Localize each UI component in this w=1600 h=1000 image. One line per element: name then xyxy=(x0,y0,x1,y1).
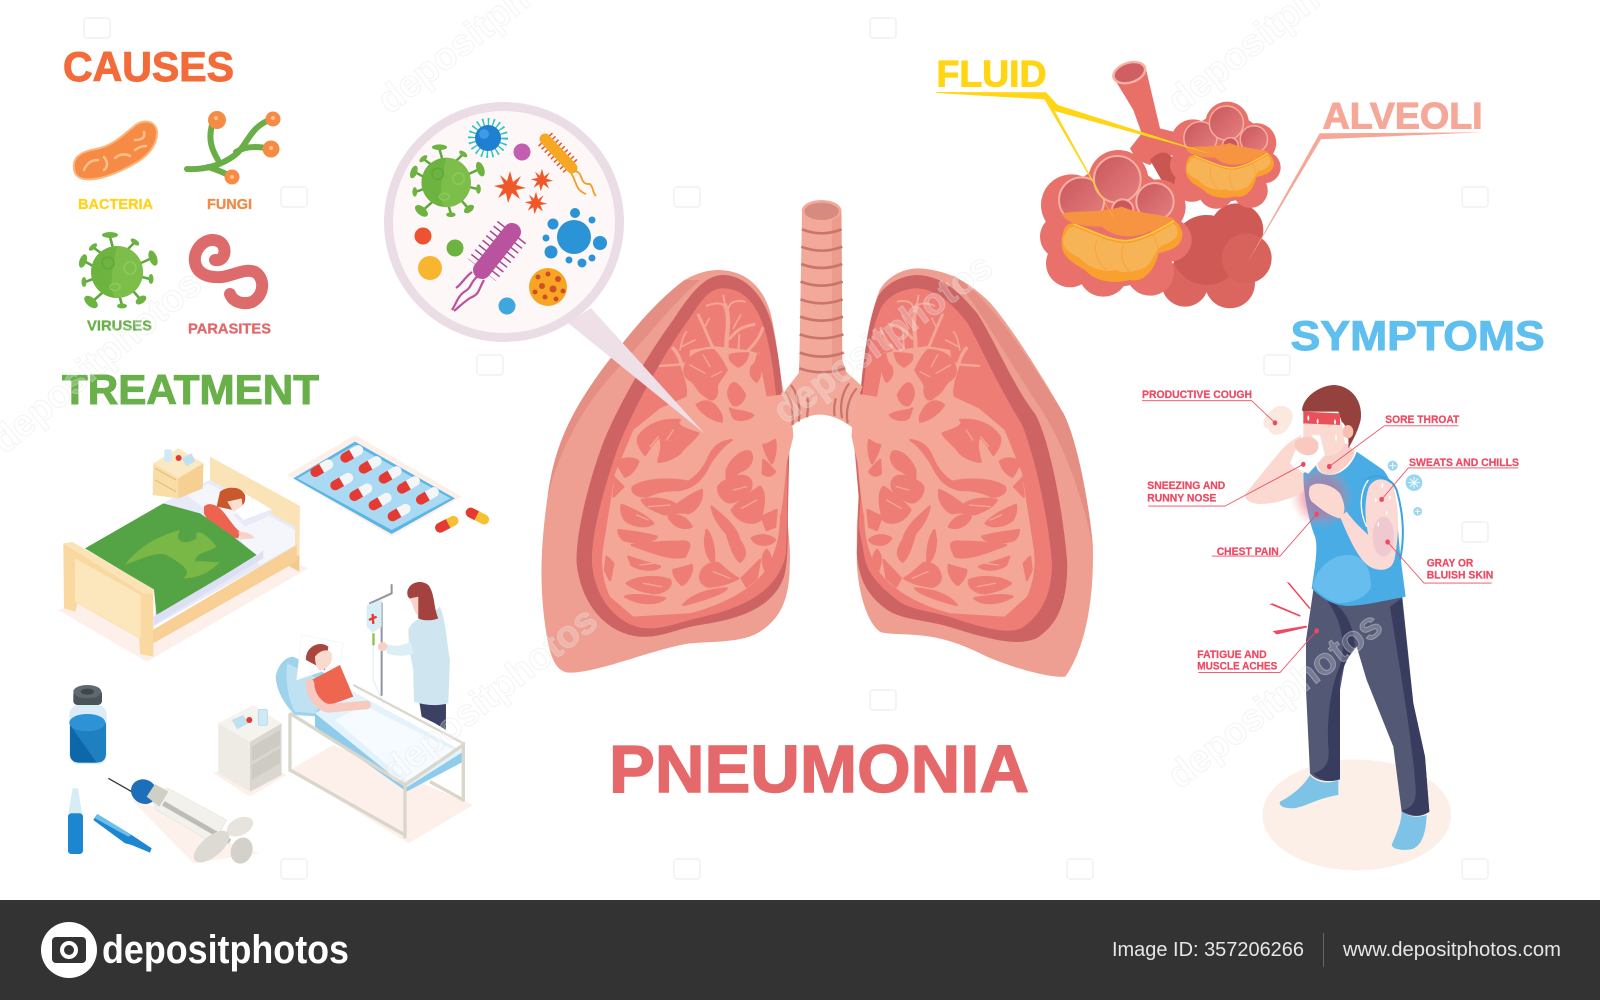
neck and head xyxy=(1302,385,1361,474)
man: legs and shoes xyxy=(1280,590,1429,850)
symptom labels: GRAY OR xyxy=(1427,557,1473,569)
orange stars xyxy=(494,169,553,214)
logo camera icon xyxy=(41,922,97,978)
back lobes xyxy=(1150,153,1272,308)
label: fluid: FLUID xyxy=(936,54,1046,95)
arm across chest xyxy=(1309,476,1403,570)
symptom labels: SORE THROAT xyxy=(1385,414,1460,426)
blue spiky microbe xyxy=(472,122,504,154)
raised arm and tissue xyxy=(1245,435,1325,504)
man: pain spikes and leader lines xyxy=(1142,401,1518,673)
image id: Image ID: 357206266 xyxy=(1112,939,1304,961)
leader lines and dots xyxy=(1142,401,1518,673)
illustration: alveoli cross-section xyxy=(1040,57,1281,308)
alveoli leader line xyxy=(1247,132,1482,263)
chest pain glow xyxy=(1290,465,1353,528)
watermark overlay: depositphotos xyxy=(766,245,1001,432)
illustration: syringe xyxy=(108,775,260,868)
yellow spotted microbe xyxy=(529,268,567,306)
symptom labels: MUSCLE ACHES xyxy=(1197,661,1277,673)
illustration: dropper and ampoule xyxy=(68,788,152,854)
label: parasites: PARASITES xyxy=(188,322,271,338)
symptom labels: CHEST PAIN xyxy=(1217,546,1279,558)
heading: treatment: TREATMENT xyxy=(62,366,319,413)
watermark overlay: depositphotos xyxy=(1160,604,1390,797)
fluid-filled alveolar sac xyxy=(1040,150,1192,297)
icon: viruses xyxy=(77,232,159,311)
icon: parasites xyxy=(195,240,262,303)
label: fungi: FUNGI xyxy=(207,197,252,213)
floor shadow under man xyxy=(1262,760,1451,870)
coloured dots xyxy=(414,228,516,314)
watermark overlay: depositphotos xyxy=(375,599,605,792)
shirt xyxy=(1303,452,1406,606)
pain spikes xyxy=(1269,582,1311,634)
bronchiole tube xyxy=(1109,57,1180,165)
icon: fungi xyxy=(187,111,280,184)
purple dot xyxy=(514,144,530,160)
callout pointer from bubble to lung xyxy=(568,308,704,433)
purple bacterium xyxy=(452,232,512,311)
right lung xyxy=(853,268,1093,677)
logo wordmark: depositphotos xyxy=(102,928,349,972)
upper fluid-filled alveolar sac xyxy=(1170,102,1281,209)
fluid leader line xyxy=(936,92,1212,224)
label: bacteria: BACTERIA xyxy=(78,197,154,213)
website: www.depositphotos.com xyxy=(1342,939,1561,961)
symptom labels: FATIGUE AND xyxy=(1197,649,1267,661)
symptom labels: PRODUCTIVE COUGH xyxy=(1142,389,1252,401)
heading: causes: CAUSES xyxy=(63,43,234,90)
symptom labels xyxy=(1142,389,1519,673)
illustration: home bed rest xyxy=(58,448,308,662)
symptom labels: SWEATS AND CHILLS xyxy=(1409,457,1519,469)
icon: bacteria xyxy=(74,122,157,179)
man: torso, head and arms xyxy=(1245,385,1422,606)
symptom labels: SNEEZING AND xyxy=(1147,480,1225,492)
symptom labels: BLUISH SKIN xyxy=(1427,570,1493,582)
symptom labels: RUNNY NOSE xyxy=(1147,492,1216,504)
fine twigs crossing dark patches xyxy=(637,355,757,587)
bronchial tree: left lung xyxy=(602,296,793,617)
faint watermark camera marks xyxy=(84,18,1488,879)
left lung xyxy=(541,270,790,673)
illustration: lung lobes xyxy=(541,268,1093,677)
magnifier bubble: pathogens xyxy=(388,106,620,338)
illustration: antibiotic blister pack xyxy=(287,435,491,537)
title: pneumonia: PNEUMONIA xyxy=(609,732,1029,807)
watermark overlay xyxy=(0,0,1390,797)
snowflakes xyxy=(1388,461,1422,516)
bronchial tree: right lung (mirrored) xyxy=(851,296,1035,617)
blue virus xyxy=(542,208,607,268)
label: alveoli: ALVEOLI xyxy=(1323,96,1483,137)
label: viruses: VIRUSES xyxy=(87,318,152,334)
illustration: vaccine vial xyxy=(69,685,107,764)
virus xyxy=(408,144,487,219)
illustration: hospital bed with doctor xyxy=(213,582,473,843)
cough puff xyxy=(1263,406,1293,435)
orange bacterium with flagella xyxy=(545,139,596,196)
heading: symptoms: SYMPTOMS xyxy=(1291,312,1545,359)
footer bar xyxy=(0,900,1600,1000)
trachea and bronchi xyxy=(780,200,863,428)
